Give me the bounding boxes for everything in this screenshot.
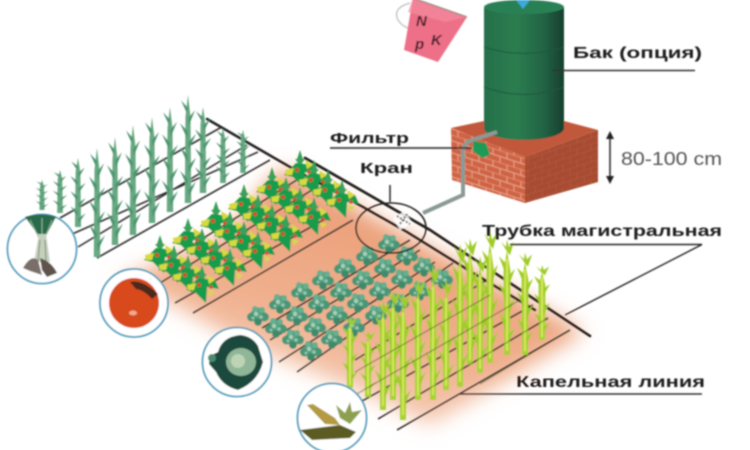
tap callout: Кран [360,160,413,177]
tomato plants [144,150,359,303]
tank [484,0,564,140]
filter [473,141,490,158]
pipe and filter [423,132,497,213]
main pipe [207,119,590,336]
soil bed [115,168,585,425]
bucket NPK: N [416,13,428,30]
icon: garlic circle [8,214,76,284]
height dimension: 80-100 cm [621,149,722,169]
drip lines over corn [355,295,570,395]
tap callout [356,160,426,253]
label: drip line: Капельная линия [516,374,705,391]
label: main pipe [482,223,722,315]
icon: corn circle [298,384,366,450]
bucket NPK: p [414,36,424,53]
drip lines [60,128,570,430]
garlic plants [36,95,250,257]
label: tank: Бак (опция) [573,45,702,62]
brick base [451,121,598,203]
label: main pipe: Трубка магистральная [482,223,722,240]
icon: cabbage circle [202,328,272,396]
cabbage plants [247,234,453,361]
icon: water drop [516,0,530,9]
bucket NPK [396,0,467,62]
bucket NPK: K [431,32,443,49]
corn plants [342,231,550,420]
icon: tomato circle [100,269,168,337]
height dimension [606,131,722,184]
label: filter: Фильтр [330,130,409,147]
